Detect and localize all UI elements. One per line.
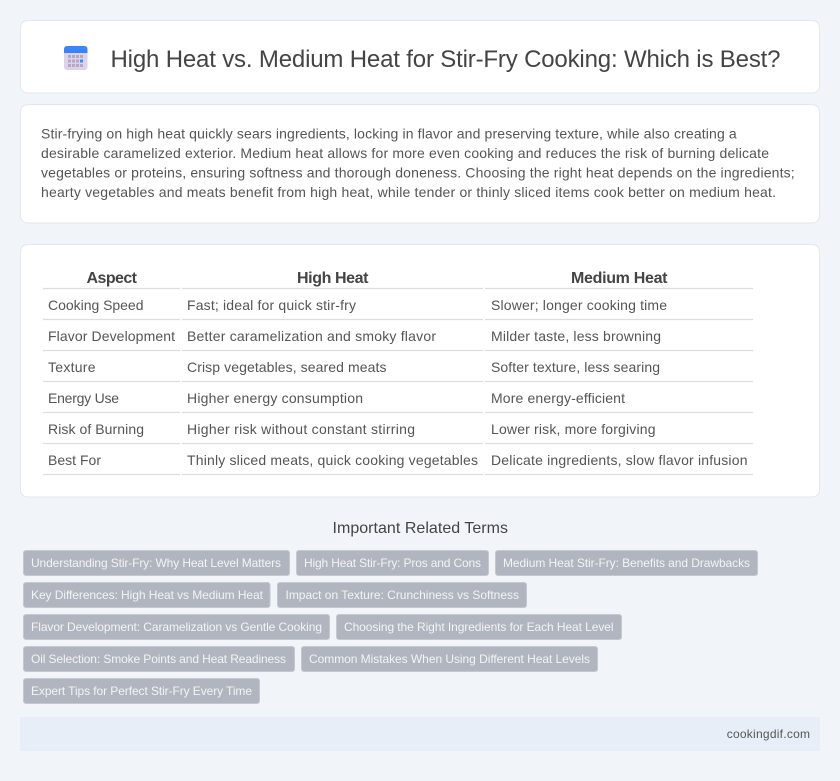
row: cooking speed: Slower; longer cooking time — [491, 297, 667, 313]
row: risk of burning: Lower risk, more forgiving — [491, 421, 656, 437]
row: energy use: Energy Use — [48, 390, 119, 406]
tag: key differences — [24, 582, 270, 608]
tag: common mistakes — [302, 646, 598, 672]
row: flavor development: Better caramelization and smoky flavor — [187, 328, 436, 344]
text block: introduction paragraph: hearty vegetables and meats benefit from high heat, while tender or thinly sliced items cook better on medium heat. — [41, 184, 776, 200]
tag: flavor development — [24, 614, 330, 640]
tag: medium heat benefits — [496, 550, 758, 576]
row: texture — [48, 359, 660, 375]
tag: high heat pros and cons: High Heat Stir-Fry: Pros and Cons — [304, 556, 481, 570]
table header — [86, 270, 668, 287]
row: cooking speed: Cooking Speed — [48, 297, 144, 313]
row: risk of burning: Higher risk without constant stirring — [187, 421, 415, 437]
tag: common mistakes: Common Mistakes When Using Different Heat Levels — [309, 652, 590, 666]
row: texture: Texture — [48, 359, 96, 375]
tag: choosing ingredients: Choosing the Right Ingredients for Each Heat Level — [344, 620, 614, 634]
panel: header — [20, 20, 820, 93]
row: best for — [48, 452, 748, 468]
text block: introduction paragraph: Stir-frying on high heat quickly sears ingredients, locking in flavor and preserving texture, while also creating a — [41, 126, 737, 142]
row: best for: Thinly sliced meats, quick cooking vegetables — [187, 452, 478, 468]
row: energy use: Higher energy consumption — [187, 390, 363, 406]
row: best for: Best For — [48, 452, 101, 468]
text block: introduction paragraph — [41, 126, 795, 200]
tag: high heat pros and cons — [296, 550, 488, 576]
row: risk of burning — [48, 421, 656, 437]
table header: High Heat — [297, 270, 369, 287]
tag: expert tips — [24, 678, 260, 704]
tag: impact on texture — [278, 582, 526, 608]
footer — [20, 717, 820, 751]
row: flavor development — [48, 328, 661, 344]
text block: introduction paragraph: desirable caramelized exterior. Medium heat allows for more even cooking and reduces the risk of burning delicate — [41, 145, 769, 161]
related term tags — [24, 550, 758, 704]
row: texture: Crisp vegetables, seared meats — [187, 359, 386, 375]
title: High Heat vs. Medium Heat for Stir-Fry Cooking: Which is Best? — [110, 46, 780, 73]
row: best for: Delicate ingredients, slow flavor infusion — [491, 452, 748, 468]
icon: calendar — [64, 46, 88, 70]
tag: medium heat benefits: Medium Heat Stir-Fry: Benefits and Drawbacks — [503, 556, 750, 570]
tag: oil selection — [24, 646, 294, 672]
heading: important related terms: Important Related Terms — [332, 520, 508, 537]
tag: impact on texture: Impact on Texture: Crunchiness vs Softness — [286, 588, 519, 602]
row: risk of burning: Risk of Burning — [48, 421, 144, 437]
panel: introduction — [20, 104, 820, 223]
row: cooking speed — [48, 297, 667, 313]
table header: Aspect — [86, 270, 138, 287]
row: cooking speed: Fast; ideal for quick stir-fry — [187, 297, 356, 313]
tag: choosing ingredients — [336, 614, 622, 640]
tag: oil selection: Oil Selection: Smoke Points and Heat Readiness — [31, 652, 286, 666]
row: flavor development: Flavor Development — [48, 328, 175, 344]
tag: understanding stir-fry — [24, 550, 290, 576]
tag: expert tips: Expert Tips for Perfect Stir-Fry Every Time — [31, 684, 252, 698]
table header: Medium Heat — [571, 270, 668, 287]
tag: understanding stir-fry: Understanding Stir-Fry: Why Heat Level Matters — [31, 556, 281, 570]
tag: flavor development: Flavor Development: Caramelization vs Gentle Cooking — [31, 620, 322, 634]
row: texture: Softer texture, less searing — [491, 359, 660, 375]
row: flavor development: Milder taste, less browning — [491, 328, 661, 344]
footer source text: cookingdif.com — [727, 727, 810, 741]
text block: introduction paragraph: vegetables or proteins, ensuring softness and thorough doneness. Choosing the right heat depends on the ingredients; — [41, 164, 795, 180]
row: energy use: More energy-efficient — [491, 390, 625, 406]
panel: comparison table — [20, 244, 820, 497]
row: energy use — [48, 390, 625, 406]
tag: key differences: Key Differences: High Heat vs Medium Heat — [31, 588, 264, 602]
